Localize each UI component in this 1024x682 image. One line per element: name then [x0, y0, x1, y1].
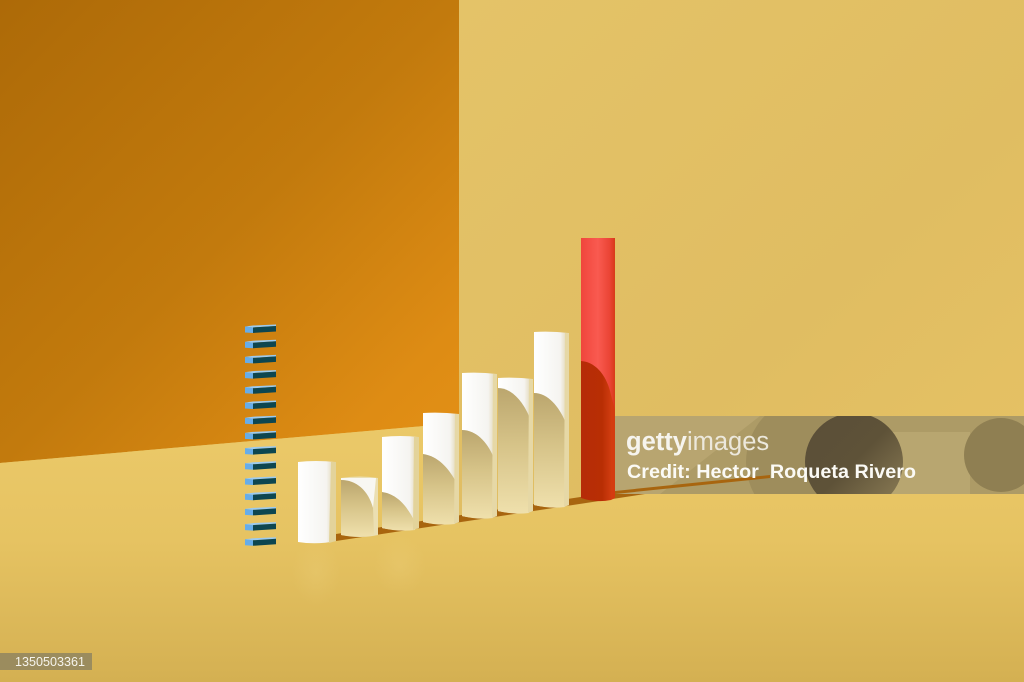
- image id label: 1350503361: [15, 655, 85, 669]
- panel: floor: [0, 423, 1024, 682]
- bar 1: white column: [298, 461, 336, 543]
- bar 4: white column with shadow: [423, 413, 459, 525]
- bar 7: white column with shadow: [534, 332, 569, 508]
- image id label: [0, 653, 92, 670]
- watermark logo: gettyimages: [626, 428, 769, 456]
- shadow strip at base of columns: [336, 473, 770, 541]
- bar 5: white column with shadow: [462, 373, 497, 519]
- bar 6: white column with shadow: [498, 378, 533, 514]
- panel: left orange wall: [0, 0, 459, 463]
- panel: right yellow wall: [459, 0, 1024, 520]
- watermark panel: [615, 416, 1024, 494]
- bar 8: tall red column: [581, 238, 615, 501]
- bar 2: shaded column: [341, 476, 378, 537]
- floor reflections under columns: [292, 535, 426, 606]
- watermark credit: Credit: Hector Roqueta Rivero: [627, 462, 916, 483]
- bar 3: white column with shadow: [382, 436, 419, 531]
- icon: blue striped ladder: [245, 324, 276, 546]
